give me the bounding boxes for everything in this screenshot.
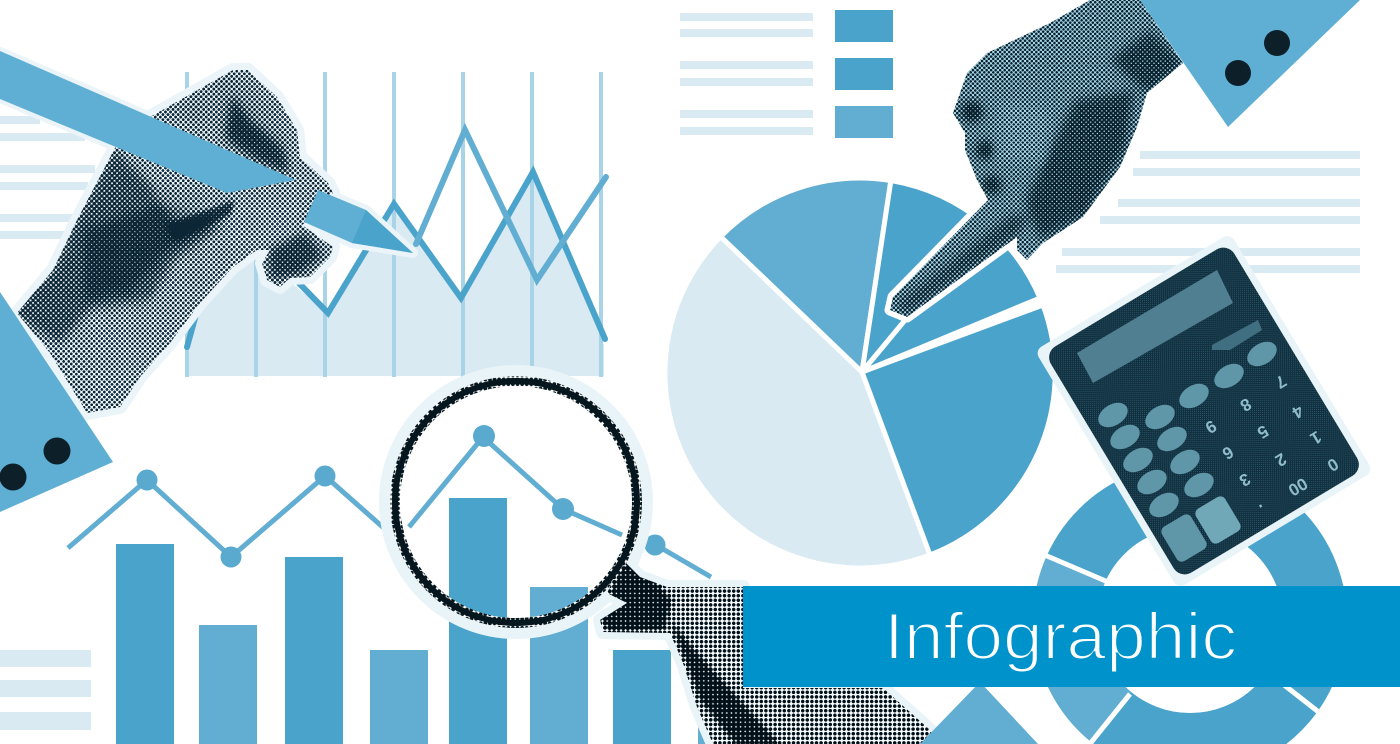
digit labels: 2 [1272, 449, 1290, 470]
digit labels: 9 [1202, 416, 1220, 437]
area fill [186, 172, 604, 376]
title text: Infographic [884, 599, 1237, 673]
digit labels: 1 [1307, 427, 1325, 448]
pencil tip [304, 190, 413, 253]
bar chart [116, 498, 718, 744]
legend squares [835, 10, 893, 138]
hand halftone [880, 0, 1190, 325]
pencil halo [0, 52, 413, 253]
title banner [743, 586, 1400, 687]
lens ring [395, 381, 637, 623]
display [1077, 270, 1233, 383]
trend line with markers [68, 425, 711, 577]
pie chart [665, 178, 1055, 568]
digit labels: . [1256, 500, 1270, 519]
hand halo [890, 0, 1183, 317]
icon: magnifying glass [386, 372, 945, 744]
handle hand halftone [595, 555, 945, 744]
digit labels [1202, 371, 1342, 519]
keys [1094, 337, 1281, 564]
solar strip [1212, 320, 1262, 350]
calculator body [1035, 233, 1373, 589]
digit labels: 7 [1272, 371, 1290, 392]
lens halo [386, 372, 646, 632]
dark line series [187, 172, 605, 347]
text lines: bottom left [0, 650, 91, 730]
hand halo [17, 70, 333, 413]
icon: pointing hand [880, 0, 1190, 325]
digit labels: 00 [1285, 474, 1311, 500]
digit labels: 6 [1219, 442, 1237, 463]
digit labels: 5 [1254, 421, 1272, 442]
text lines: top centre [680, 13, 813, 135]
hand halftone [18, 70, 333, 413]
light line series [416, 130, 606, 280]
text lines: right [1056, 151, 1360, 273]
digit labels: 0 [1324, 454, 1342, 475]
icon: left cuff [0, 292, 113, 512]
handle hand halo [600, 560, 938, 744]
digit labels: 4 [1288, 401, 1307, 423]
icon: lower cuff [920, 682, 1038, 744]
icon: calculator [1035, 233, 1373, 589]
icon: pencil hand [0, 51, 413, 420]
pencil body [0, 51, 296, 193]
icon: top right cuff [1140, 0, 1360, 127]
digit labels: 3 [1236, 469, 1254, 490]
digit labels: 8 [1237, 394, 1255, 415]
donut chart [1040, 495, 1325, 744]
pencil point [352, 210, 413, 253]
line chart with area [186, 72, 606, 377]
text lines: left [0, 116, 95, 239]
